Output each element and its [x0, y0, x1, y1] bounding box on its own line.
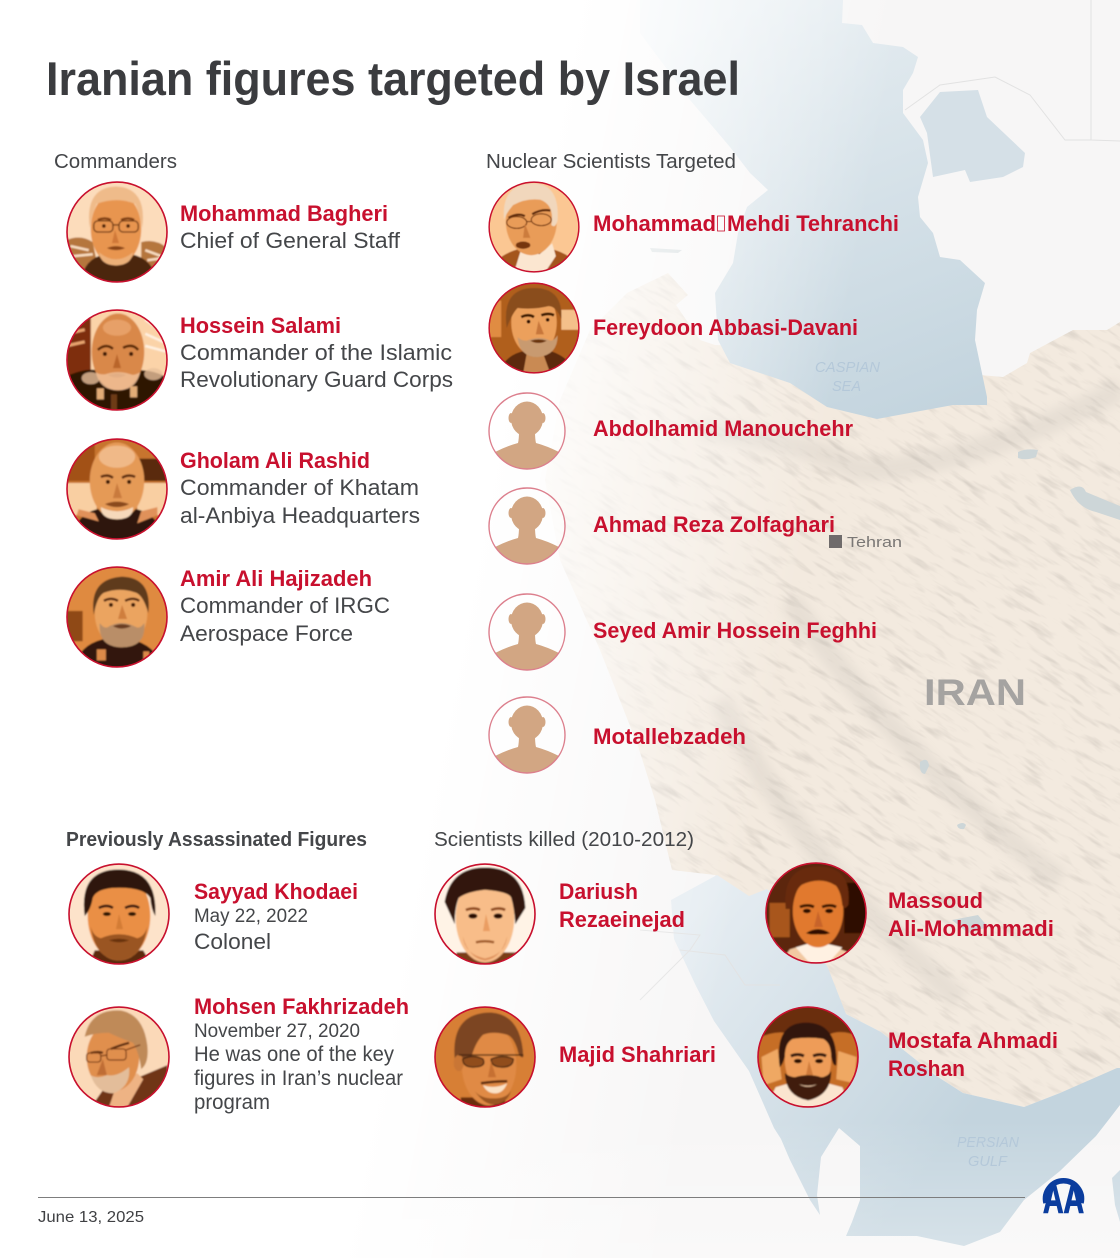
map label: Caspian Sea: [815, 359, 880, 395]
text: Mohammad Bagheri: [180, 201, 401, 253]
panel: scientists killed 2010-2012: [434, 829, 1058, 1108]
map: Iran land: [545, 273, 1120, 1107]
scientist: Motallebzadeh: [487, 697, 746, 775]
text: Sayyad Khodaei: Colonel: [194, 929, 271, 954]
portrait: Abbasi-Davani: [488, 282, 580, 374]
text: Mostafa Ahmadi Roshan: Roshan: [888, 1056, 965, 1081]
portrait: Massoud Ali-Mohammadi: [766, 862, 866, 964]
background map: [556, 0, 1120, 1246]
text: Mohammad Bagheri: Mohammad Bagheri: [180, 201, 388, 226]
text: Massoud Ali-Mohammadi: [888, 888, 1054, 941]
text: Mohsen Fakhrizadeh: Mohsen Fakhrizadeh: [194, 994, 409, 1019]
text: Gholam Ali Rashid: al-Anbiya Headquarters: [180, 503, 420, 528]
map label: Persian Gulf: PERSIAN: [957, 1134, 1019, 1151]
portrait: Mohammad Bagheri: [66, 182, 168, 282]
text: Dariush Rezaeinejad: Rezaeinejad: [559, 907, 685, 932]
portrait: Tehranchi: [488, 182, 580, 272]
text: Mohsen Fakhrizadeh: program: [194, 1091, 270, 1114]
text: Sayyad Khodaei: Sayyad Khodaei: [194, 879, 358, 904]
map: borders: [640, 0, 1120, 1000]
text: Dariush Rezaeinejad: Dariush: [559, 879, 638, 904]
portrait: Dariush Rezaeinejad: [434, 864, 536, 964]
text: Sayyad Khodaei: [194, 879, 358, 954]
map label: Tehran: Tehran: [847, 534, 902, 551]
footer date: June 13, 2025: [38, 1209, 144, 1226]
text: Ahmad Reza Zolfaghari: Ahmad Reza Zolfaghari: [593, 512, 835, 537]
scientist: Seyed Amir Hossein Feghhi: [487, 594, 877, 672]
text: Hossein Salami: Commander of the Islamic: [180, 340, 452, 365]
figure: Sayyad Khodaei: [68, 864, 358, 964]
text: Gholam Ali Rashid: Commander of Khatam: [180, 475, 419, 500]
text: Gholam Ali Rashid: [180, 448, 420, 528]
commander: Hossein Salami: [66, 310, 453, 410]
figure: Mohsen Fakhrizadeh: [68, 994, 409, 1114]
logo: Anadolu Agency: AA: [1043, 1175, 1084, 1222]
text: Hossein Salami: [180, 313, 453, 392]
panel: nuclear scientists targeted: [486, 151, 899, 775]
text: Tehranchi name with missing glyph box: Mehdi Tehranchi: [727, 211, 899, 236]
map label: Caspian Sea: SEA: [832, 378, 861, 395]
scientist: Mostafa Ahmadi Roshan: [758, 1006, 1058, 1108]
portrait: Majid Shahriari: [434, 1006, 536, 1108]
text: Seyed Amir Hossein Feghhi: Seyed Amir Hossein Feghhi: [593, 618, 877, 643]
text: Motallebzadeh: Motallebzadeh: [593, 724, 746, 749]
icon: silhouette: [487, 488, 567, 566]
text: Amir Ali Hajizadeh: [180, 566, 390, 646]
panel: previously assassinated figures: [66, 829, 409, 1114]
text: Mohammad Bagheri: Chief of General Staff: [180, 228, 401, 253]
heading: scientists killed: Scientists killed (2010-2012): [434, 829, 694, 851]
map: Persian Gulf: [671, 875, 1120, 1246]
map label: Caspian Sea: CASPIAN: [815, 359, 880, 376]
text: Abdolhamid Manouchehr: Abdolhamid Manouchehr: [593, 416, 853, 441]
text: Tehranchi name with missing glyph box: [593, 211, 899, 236]
footer rule: [38, 1197, 1025, 1198]
icon: silhouette: [487, 697, 567, 775]
map: Caspian Sea: [640, 0, 987, 419]
heading: commanders: Commanders: [54, 151, 177, 173]
scientist: Mohammad Mehdi Tehranchi: [488, 182, 899, 272]
map label: Persian Gulf: [957, 1134, 1019, 1170]
text: Amir Ali Hajizadeh: Aerospace Force: [180, 621, 353, 646]
text: Mohsen Fakhrizadeh: November 27, 2020: [194, 1021, 360, 1042]
commander: Gholam Ali Rashid: [66, 438, 420, 540]
text: Dariush Rezaeinejad: [559, 879, 685, 932]
scientist: Majid Shahriari: [434, 1006, 716, 1108]
portrait: Sayyad Khodaei: [68, 864, 170, 964]
text: Amir Ali Hajizadeh: Commander of IRGC: [180, 593, 390, 618]
commander: Amir Ali Hajizadeh: [66, 566, 390, 668]
scientist: Fereydoon Abbasi-Davani: [488, 282, 858, 374]
icon: silhouette: [487, 393, 567, 471]
map label: Iran: IRAN: [924, 672, 1026, 713]
portrait: Amir Ali Hajizadeh: [66, 566, 168, 668]
scientist: Ahmad Reza Zolfaghari: [487, 488, 835, 566]
text: Amir Ali Hajizadeh: Amir Ali Hajizadeh: [180, 566, 372, 591]
scientist: Massoud Ali-Mohammadi: [766, 862, 1054, 964]
text: Sayyad Khodaei: May 22, 2022: [194, 906, 308, 927]
portrait: Mohsen Fakhrizadeh: [68, 1006, 170, 1108]
text: Mostafa Ahmadi Roshan: Mostafa Ahmadi: [888, 1028, 1058, 1053]
map label: Tehran: [829, 534, 902, 551]
text: Hossein Salami: Revolutionary Guard Corps: [180, 367, 453, 392]
portrait: Hossein Salami: [66, 310, 168, 410]
map label: Persian Gulf: GULF: [968, 1153, 1008, 1170]
text: Hossein Salami: Hossein Salami: [180, 313, 341, 338]
scientist: Dariush Rezaeinejad: [434, 864, 685, 964]
portrait: Mostafa Ahmadi Roshan: [758, 1006, 858, 1108]
text: Tehranchi name with missing glyph box: Mohammad: [593, 211, 716, 236]
heading: nuclear scientists: Nuclear Scientists Targeted: [486, 151, 736, 173]
logo: Anadolu Agency: [1043, 1175, 1084, 1222]
text: Gholam Ali Rashid: Gholam Ali Rashid: [180, 448, 370, 473]
text: Massoud Ali-Mohammadi: Ali-Mohammadi: [888, 916, 1054, 941]
text: Mohsen Fakhrizadeh: figures in Iran’s nuclear: [194, 1067, 403, 1090]
text: Mohsen Fakhrizadeh: [194, 994, 409, 1114]
title: Iranian figures targeted by Israel: [46, 52, 740, 105]
text: Abbasi-Davani: Fereydoon Abbasi-Davani: [593, 315, 858, 340]
text: Mohsen Fakhrizadeh: He was one of the key: [194, 1043, 394, 1066]
commander: Mohammad Bagheri: [66, 182, 401, 282]
text: Majid Shahriari: Majid Shahriari: [559, 1042, 716, 1067]
heading: previously assassinated: Previously Assassinated Figures: [66, 829, 367, 851]
portrait: Gholam Ali Rashid: [66, 438, 168, 540]
scientist: Abdolhamid Manouchehr: [487, 393, 853, 471]
icon: silhouette: [487, 594, 567, 672]
map: Aral Sea: [920, 90, 1025, 182]
text: Mostafa Ahmadi Roshan: [888, 1028, 1058, 1081]
text: Massoud Ali-Mohammadi: Massoud: [888, 888, 983, 913]
panel: commanders: [54, 151, 453, 668]
